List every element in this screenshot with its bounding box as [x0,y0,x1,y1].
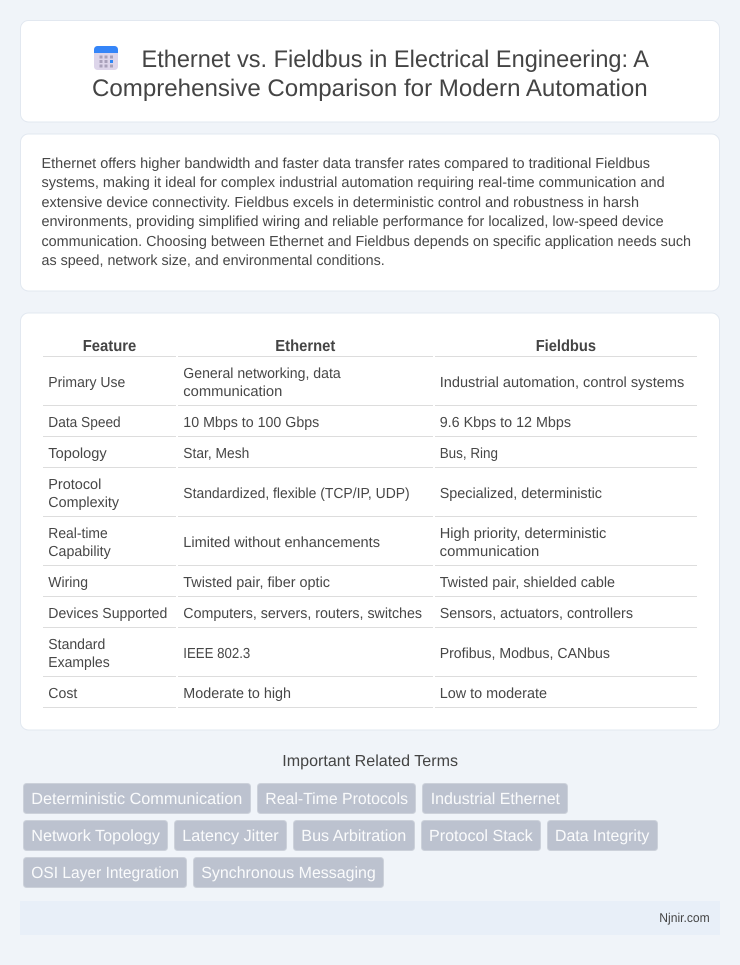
icon: calendar [94,46,118,70]
row: wiring: Wiring [48,575,88,591]
description text: environments, providing simplified wiring and reliable performance for localized, low-speed device [42,214,664,230]
row: real-time capability: Real-time [48,526,108,542]
row: data speed: 9.6 Kbps to 12 Mbps [440,415,571,431]
tag [548,820,658,850]
footer bar [20,901,720,935]
row: protocol complexity: Protocol [48,477,101,493]
row: devices supported: Sensors, actuators, controllers [440,606,633,622]
description text: as speed, network size, and environmental conditions. [42,253,385,269]
title [92,46,649,102]
description text: Ethernet offers higher bandwidth and faster data transfer rates compared to traditional Fieldbus [42,156,650,172]
row: standard examples: IEEE 802.3 [183,646,250,662]
row: protocol complexity [48,477,602,511]
row: protocol complexity: Standardized, flexible (TCP/IP, UDP) [183,486,410,502]
tag: Latency Jitter [182,827,279,845]
row: real-time capability: High priority, deterministic [440,526,606,542]
row: data speed [48,415,571,431]
row: topology: Star, Mesh [183,446,249,462]
row: primary use: General networking, data [183,366,342,382]
row: cost: Moderate to high [183,686,291,702]
row: real-time capability: Limited without enhancements [183,535,380,551]
row: standard examples [48,637,610,671]
description text: communication. Choosing between Ethernet and Fieldbus depends on specific application needs such [42,234,691,250]
tag: Deterministic Communication [31,790,242,808]
description text: systems, making it ideal for complex industrial automation requiring real-time communication and [42,175,665,191]
row: real-time capability: Capability [48,544,111,560]
tag: Real-Time Protocols [265,790,408,808]
row: wiring: Twisted pair, shielded cable [440,575,615,591]
row: topology: Bus, Ring [440,446,498,462]
row: cost: Low to moderate [440,686,547,702]
row: cost [48,686,547,702]
row: topology: Topology [48,446,107,462]
row: data speed: 10 Mbps to 100 Gbps [183,415,319,431]
tag [24,784,250,814]
panel: comparison table [20,313,720,730]
tag: Synchronous Messaging [201,864,376,882]
row: real-time capability: communication [440,544,539,560]
related term tags [24,784,658,888]
description text [42,156,691,269]
row: primary use [48,366,684,400]
description text: extensive device connectivity. Fieldbus excels in deterministic control and robustness in harsh [42,195,639,211]
panel: description [20,134,720,291]
row: cost: Cost [48,686,77,702]
tag: Bus Arbitration [301,827,406,845]
tag: Data Integrity [555,827,650,845]
tag [24,858,186,888]
row: real-time capability [48,526,606,560]
row: devices supported [48,606,633,622]
table header row: Ethernet [275,338,336,355]
tag: Industrial Ethernet [431,790,560,808]
tag [422,784,568,814]
tag [258,784,416,814]
tag [294,820,414,850]
tag: Network Topology [31,827,161,845]
table header row: Feature [83,338,136,355]
row: topology [48,446,498,462]
table header row: Fieldbus [536,338,596,355]
row: standard examples: Profibus, Modbus, CANbus [440,646,610,662]
row: devices supported: Computers, servers, routers, switches [183,606,422,622]
row: data speed: Data Speed [48,415,121,431]
tag [24,820,168,850]
footer bar: Njnir.com [659,910,710,925]
tag [194,858,384,888]
tag [174,820,286,850]
row: protocol complexity: Complexity [48,495,120,511]
row: primary use: Industrial automation, control systems [440,375,684,391]
title: Comprehensive Comparison for Modern Automation [92,75,648,102]
panel: title header [20,20,720,122]
row: standard examples: Standard [48,637,105,653]
row: protocol complexity: Specialized, deterministic [440,486,602,502]
row: primary use: communication [183,384,282,400]
row: devices supported: Devices Supported [48,606,167,622]
title: Ethernet vs. Fieldbus in Electrical Engineering: A [142,46,649,73]
table header row [83,338,596,355]
row: standard examples: Examples [48,655,110,671]
row: wiring: Twisted pair, fiber optic [183,575,330,591]
heading: important related terms: Important Related Terms [282,753,458,770]
tag [422,820,540,850]
tag: OSI Layer Integration [31,864,179,882]
row: primary use: Primary Use [48,375,125,391]
tag: Protocol Stack [429,827,534,845]
row: wiring [48,575,615,591]
